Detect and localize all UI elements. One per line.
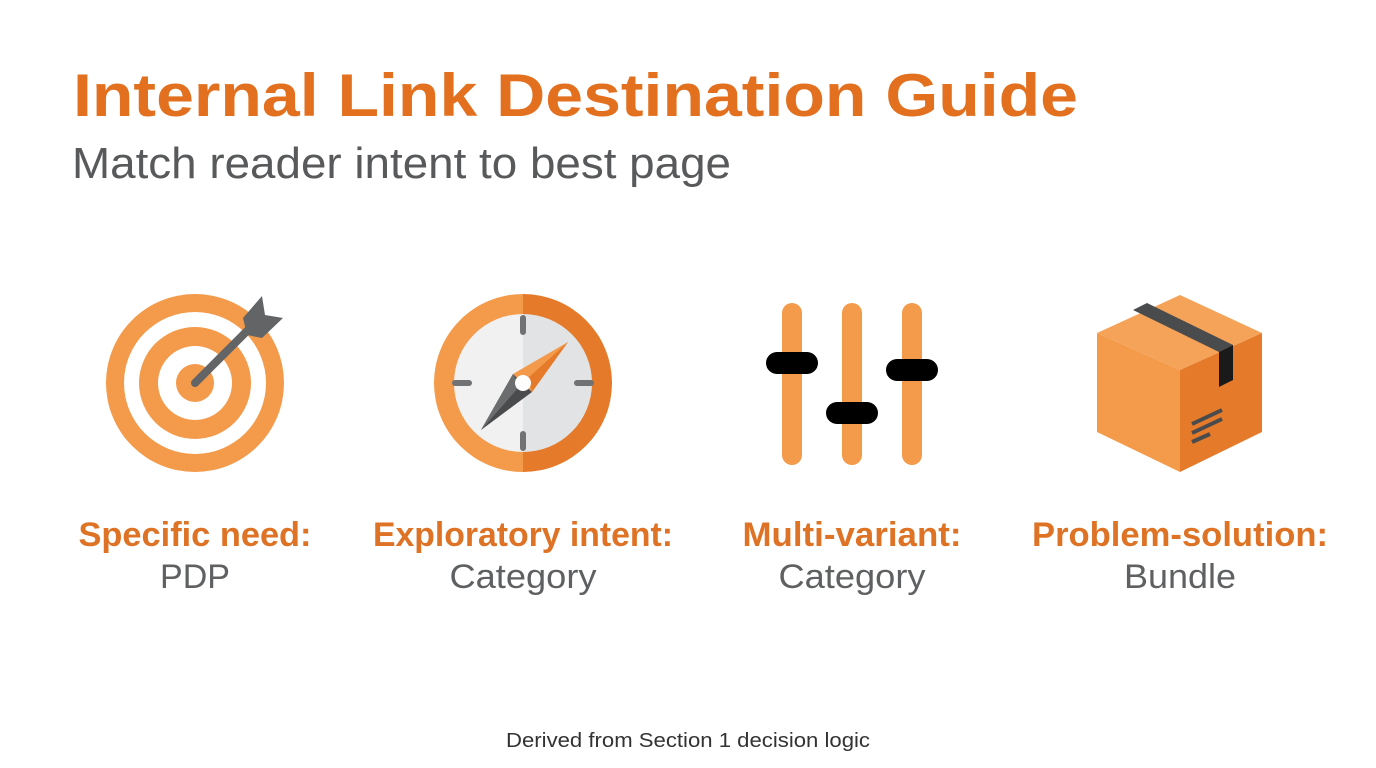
label: problem-solution bbox=[1032, 516, 1328, 596]
icon: sliders bbox=[766, 313, 938, 455]
label: specific need: Specific need: bbox=[78, 516, 312, 554]
icon: box bbox=[1097, 295, 1262, 472]
icon: target bbox=[106, 294, 284, 472]
label: problem-solution: Problem-solution: bbox=[1032, 516, 1328, 554]
label: problem-solution: Bundle bbox=[1124, 558, 1236, 596]
icon: compass bbox=[434, 294, 612, 472]
footer note: Derived from Section 1 decision logic bbox=[506, 730, 870, 752]
label: multi-variant: Multi-variant: bbox=[742, 516, 962, 554]
label: multi-variant bbox=[742, 516, 962, 596]
label: multi-variant: Category bbox=[778, 558, 926, 596]
title: Internal Link Destination Guide bbox=[73, 62, 1078, 129]
label: specific need bbox=[78, 516, 312, 596]
label: exploratory intent bbox=[373, 516, 673, 596]
label: exploratory intent: Exploratory intent: bbox=[373, 516, 673, 554]
subtitle: Match reader intent to best page bbox=[72, 139, 731, 188]
label: specific need: PDP bbox=[160, 558, 230, 596]
label: exploratory intent: Category bbox=[450, 558, 596, 596]
